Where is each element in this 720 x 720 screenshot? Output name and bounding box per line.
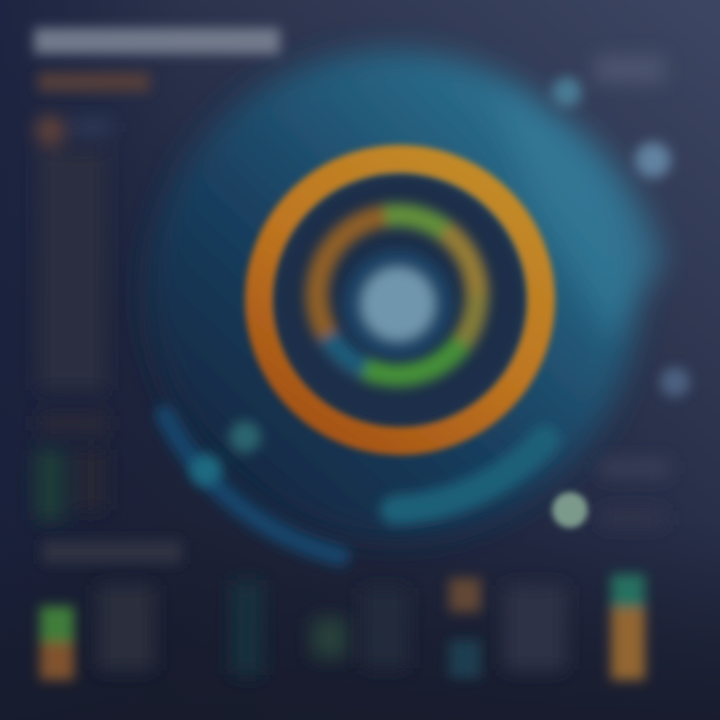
- bottom right text: [504, 585, 566, 670]
- bar: teal column: [232, 580, 262, 675]
- arc: lower left: [165, 415, 340, 556]
- dot: lower left: [229, 421, 261, 453]
- dot: bottom right: [552, 492, 588, 528]
- dot: lower left small: [190, 454, 222, 486]
- main circular chart: [259, 159, 541, 441]
- bar: green block: [312, 618, 348, 658]
- lower arcs: [165, 415, 545, 556]
- bar: orange block and blue block: [449, 578, 481, 678]
- bar: right stacked: [611, 574, 645, 680]
- center circle: [344, 250, 452, 358]
- dot: right: [635, 142, 671, 178]
- orange outer ring: [259, 159, 541, 441]
- large teal disc: [147, 50, 665, 540]
- list icon: [36, 116, 64, 144]
- bottom charts: [40, 574, 645, 680]
- dots: [190, 77, 690, 528]
- left list: [36, 116, 112, 520]
- bottom center text: [362, 588, 408, 668]
- bottom heading: [42, 540, 182, 564]
- dark ring interior: [272, 172, 528, 428]
- title: [34, 28, 280, 54]
- dot: lower right: [660, 367, 690, 397]
- inner ring: [317, 215, 477, 375]
- faint right labels: [595, 55, 670, 526]
- bar: left stacked: [40, 606, 74, 680]
- subtitle: [38, 72, 150, 92]
- bottom left text: [98, 585, 154, 670]
- arc: lower right: [395, 440, 545, 510]
- dot: upper right: [552, 77, 582, 107]
